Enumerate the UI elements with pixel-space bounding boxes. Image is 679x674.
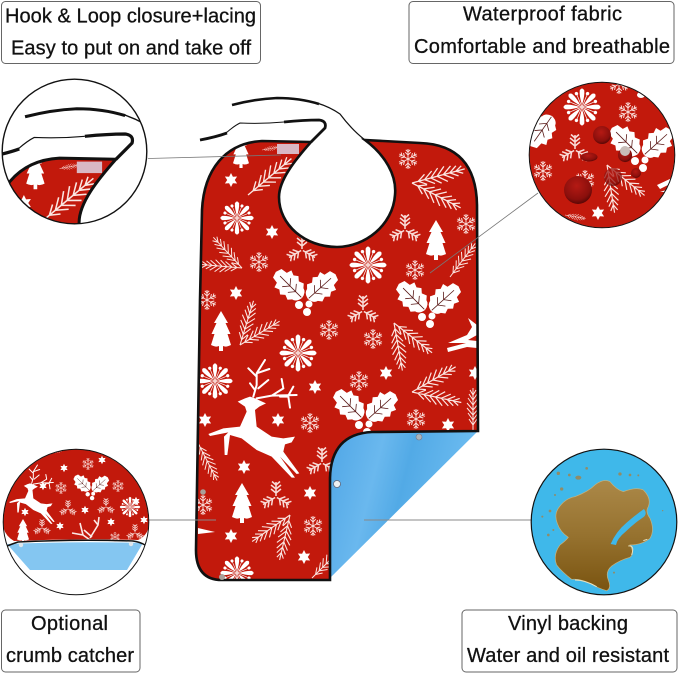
callout circle: water droplets on fabric xyxy=(528,82,676,228)
leader line: vinyl backing xyxy=(364,519,531,521)
label box: waterproof fabric: Waterproof fabric xyxy=(463,4,622,26)
label box: hook and loop closure: Easy to put on and take off xyxy=(11,38,251,60)
callout circle: crumb catcher xyxy=(3,446,149,595)
callout circle: closure detail xyxy=(2,78,148,224)
oil stain xyxy=(541,467,663,591)
snap buttons xyxy=(200,434,422,580)
callout circle: oil stain on vinyl backing xyxy=(531,449,677,595)
label box: vinyl backing: Vinyl backing xyxy=(508,613,628,635)
leader line: hook and loop xyxy=(148,155,281,158)
label box: vinyl backing xyxy=(462,610,677,672)
bib illustration xyxy=(193,98,481,590)
label box: optional crumb catcher xyxy=(2,610,140,672)
label box: optional crumb catcher: crumb catcher xyxy=(6,645,134,667)
label box: hook and loop closure xyxy=(2,2,260,64)
label box: optional crumb catcher: Optional xyxy=(31,613,108,635)
leader line: waterproof fabric xyxy=(430,193,538,273)
label box: vinyl backing: Water and oil resistant xyxy=(467,645,669,667)
label box: hook and loop closure: Hook & Loop closure+lacing xyxy=(5,6,256,28)
label box: waterproof fabric xyxy=(409,2,674,64)
label box: waterproof fabric: Comfortable and breathable xyxy=(414,36,670,58)
leader line: crumb catcher xyxy=(149,519,216,521)
